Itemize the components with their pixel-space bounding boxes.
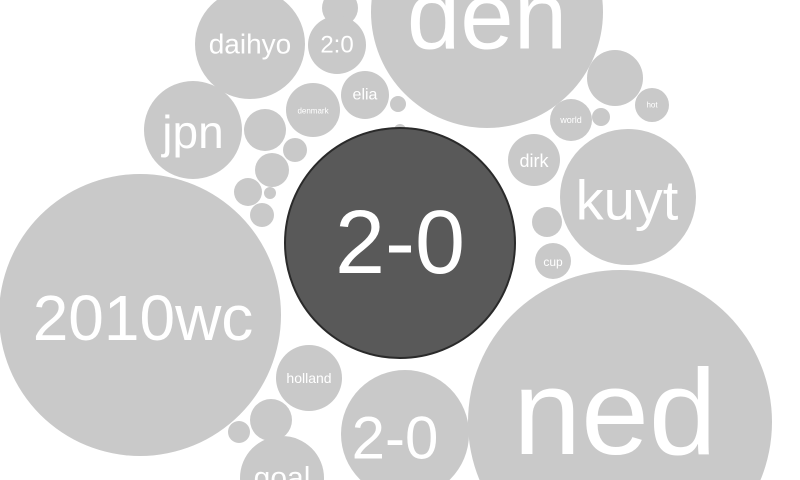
bubble: ned — [468, 270, 772, 480]
bubble: jpn — [144, 81, 242, 179]
bubble: daihyo: daihyo — [209, 28, 291, 60]
bubble: den — [371, 0, 603, 128]
bubble: elia: elia — [353, 86, 378, 104]
bubble: jpn: jpn — [160, 106, 224, 158]
bubble: dirk: dirk — [519, 151, 549, 171]
small bubbles left cluster — [234, 96, 406, 227]
bubble: world — [550, 99, 592, 141]
bubble: hot — [635, 88, 669, 122]
bubble: 2-0 main — [285, 128, 515, 358]
small bubbles right — [532, 50, 643, 237]
bubble: small top — [322, 0, 358, 26]
bubble: denmark — [286, 83, 340, 137]
bubble: 2:0 — [308, 16, 366, 74]
bubble: dirk — [508, 134, 560, 186]
bubble: ned: ned — [513, 344, 717, 480]
bubble: hot: hot — [646, 100, 658, 110]
bubble: cup — [535, 243, 571, 279]
bubble: kuyt: kuyt — [576, 168, 679, 232]
bubble: kuyt — [560, 129, 696, 265]
small bubbles bottom — [228, 399, 292, 443]
bubble: daihyo — [195, 0, 305, 99]
bubble: 2010wc: 2010wc — [33, 282, 253, 354]
bubble: 2010wc — [0, 174, 281, 456]
bubble: holland — [276, 345, 342, 411]
bubble: 2-0 main: 2-0 — [335, 193, 465, 293]
bubble: 2-0 small: 2-0 — [352, 404, 438, 472]
bubble: cup: cup — [543, 255, 563, 269]
bubble: 2-0 small — [341, 370, 469, 480]
bubble: world: world — [559, 115, 582, 125]
bubble: elia — [341, 71, 389, 119]
bubble: holland: holland — [286, 370, 332, 386]
bubble: 2:0: 2:0 — [320, 32, 354, 58]
bubble: denmark: denmark — [297, 106, 330, 116]
bubble: goal — [240, 436, 324, 480]
